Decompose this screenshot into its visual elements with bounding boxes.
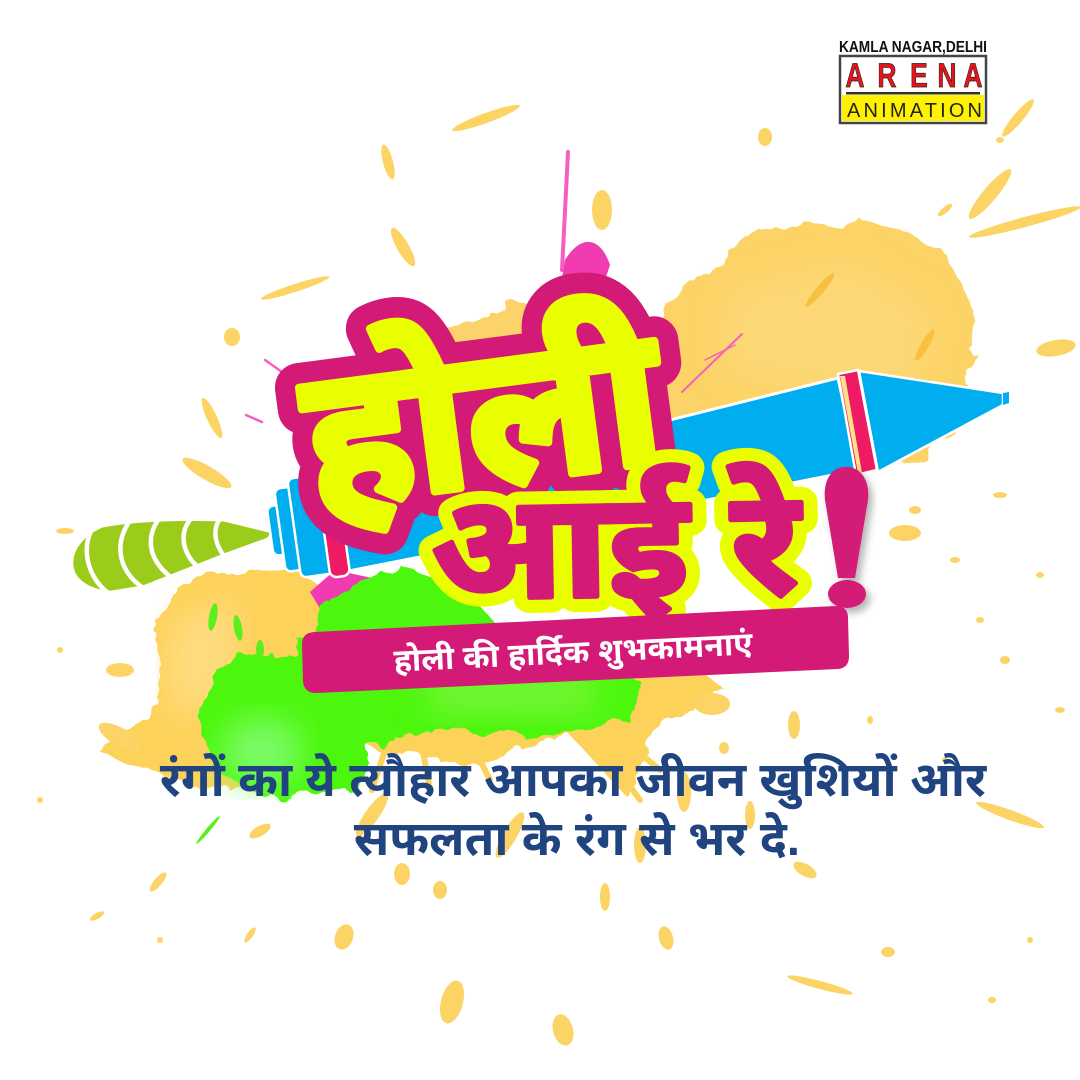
greeting message	[160, 752, 987, 866]
green paint splash	[198, 565, 640, 798]
logo box	[840, 56, 986, 123]
nozzle: green	[72, 520, 273, 593]
green droplets	[195, 603, 264, 845]
pink paint splash	[246, 152, 742, 622]
greeting message: सफलता के रंग से भर दे.	[354, 811, 800, 866]
yellow paint splash: upper right	[660, 222, 974, 470]
exclamation mark	[825, 467, 868, 608]
yellow paint splash: lower left and centre	[100, 302, 725, 800]
subtitle banner	[302, 606, 849, 693]
logo box: ANIMATION	[847, 100, 982, 122]
title: first line: होली	[292, 287, 676, 548]
barrel: blue	[267, 370, 1009, 578]
logo box: E	[910, 57, 928, 95]
logo box: A	[845, 57, 865, 95]
greeting message: रंगों का ये त्यौहार आपका जीवन खुशियों और	[160, 752, 987, 809]
logo: Arena Animation	[839, 39, 987, 123]
location label: KAMLA NAGAR,DELHI	[839, 39, 987, 56]
title: first line: होली	[292, 287, 676, 548]
logo box: R	[877, 57, 897, 95]
subtitle banner: होली की हार्दिक शुभकामनाएं	[393, 625, 754, 681]
logo box: A	[963, 57, 983, 95]
water gun illustration	[72, 370, 1009, 593]
title: second line: आई रे	[429, 461, 804, 630]
green highlight	[222, 718, 302, 786]
logo box: N	[937, 57, 957, 95]
title: second line: आई रे	[429, 461, 804, 630]
